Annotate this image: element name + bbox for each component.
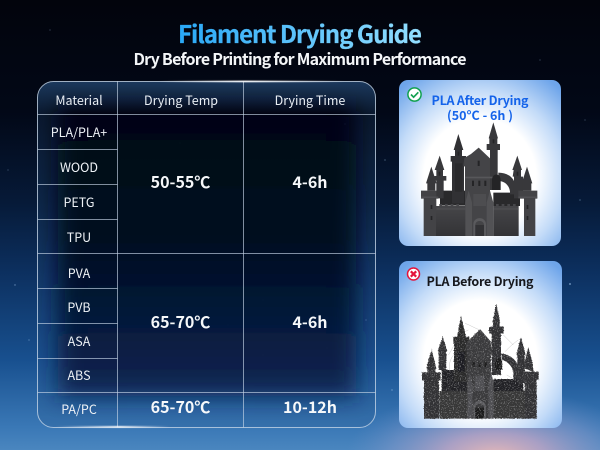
material column: PA/PC (61, 399, 97, 418)
panel: PLA after drying (399, 80, 561, 246)
castle: stringy print (422, 303, 539, 419)
stringing threads (443, 323, 518, 382)
heading: PLA after drying (432, 90, 529, 124)
material column (51, 122, 107, 418)
material column: WOOD (60, 157, 98, 176)
icon: red cross (408, 268, 420, 280)
drying time values: 4-6h (292, 309, 328, 333)
heading: PLA after drying: (50°C - 6h ) (447, 105, 513, 124)
material column: ASA (68, 331, 91, 350)
table header row: Drying Time (275, 90, 345, 109)
drying temperature values (151, 169, 210, 418)
panel: PLA before drying (399, 261, 562, 428)
drying time values (283, 169, 337, 418)
drying temperature values: 65-70℃ (151, 309, 210, 333)
drying time values: 10-12h (283, 394, 337, 418)
subtitle: Dry Before Printing for Maximum Performance (134, 46, 466, 70)
table header row: Material (55, 90, 103, 109)
material column: TPU (67, 227, 91, 246)
panel: drying table (37, 81, 376, 428)
material column: PETG (63, 192, 95, 211)
castle: clean print (421, 122, 537, 236)
material column: PVA (68, 263, 91, 282)
icon: green check (408, 88, 421, 101)
heading: PLA before drying: PLA Before Drying (426, 271, 534, 290)
table header row: Drying Temp (144, 90, 218, 109)
heading: PLA after drying: PLA After Drying (432, 90, 529, 109)
title: Filament Drying Guide (178, 15, 422, 50)
drying temperature values: 65-70℃ (151, 394, 210, 418)
material column: ABS (67, 365, 91, 384)
drying time values: 4-6h (292, 169, 328, 193)
material column: PVB (67, 297, 91, 316)
table header row (55, 90, 345, 109)
drying temperature values: 50-55℃ (151, 169, 210, 193)
material column: PLA/PLA+ (51, 122, 107, 141)
